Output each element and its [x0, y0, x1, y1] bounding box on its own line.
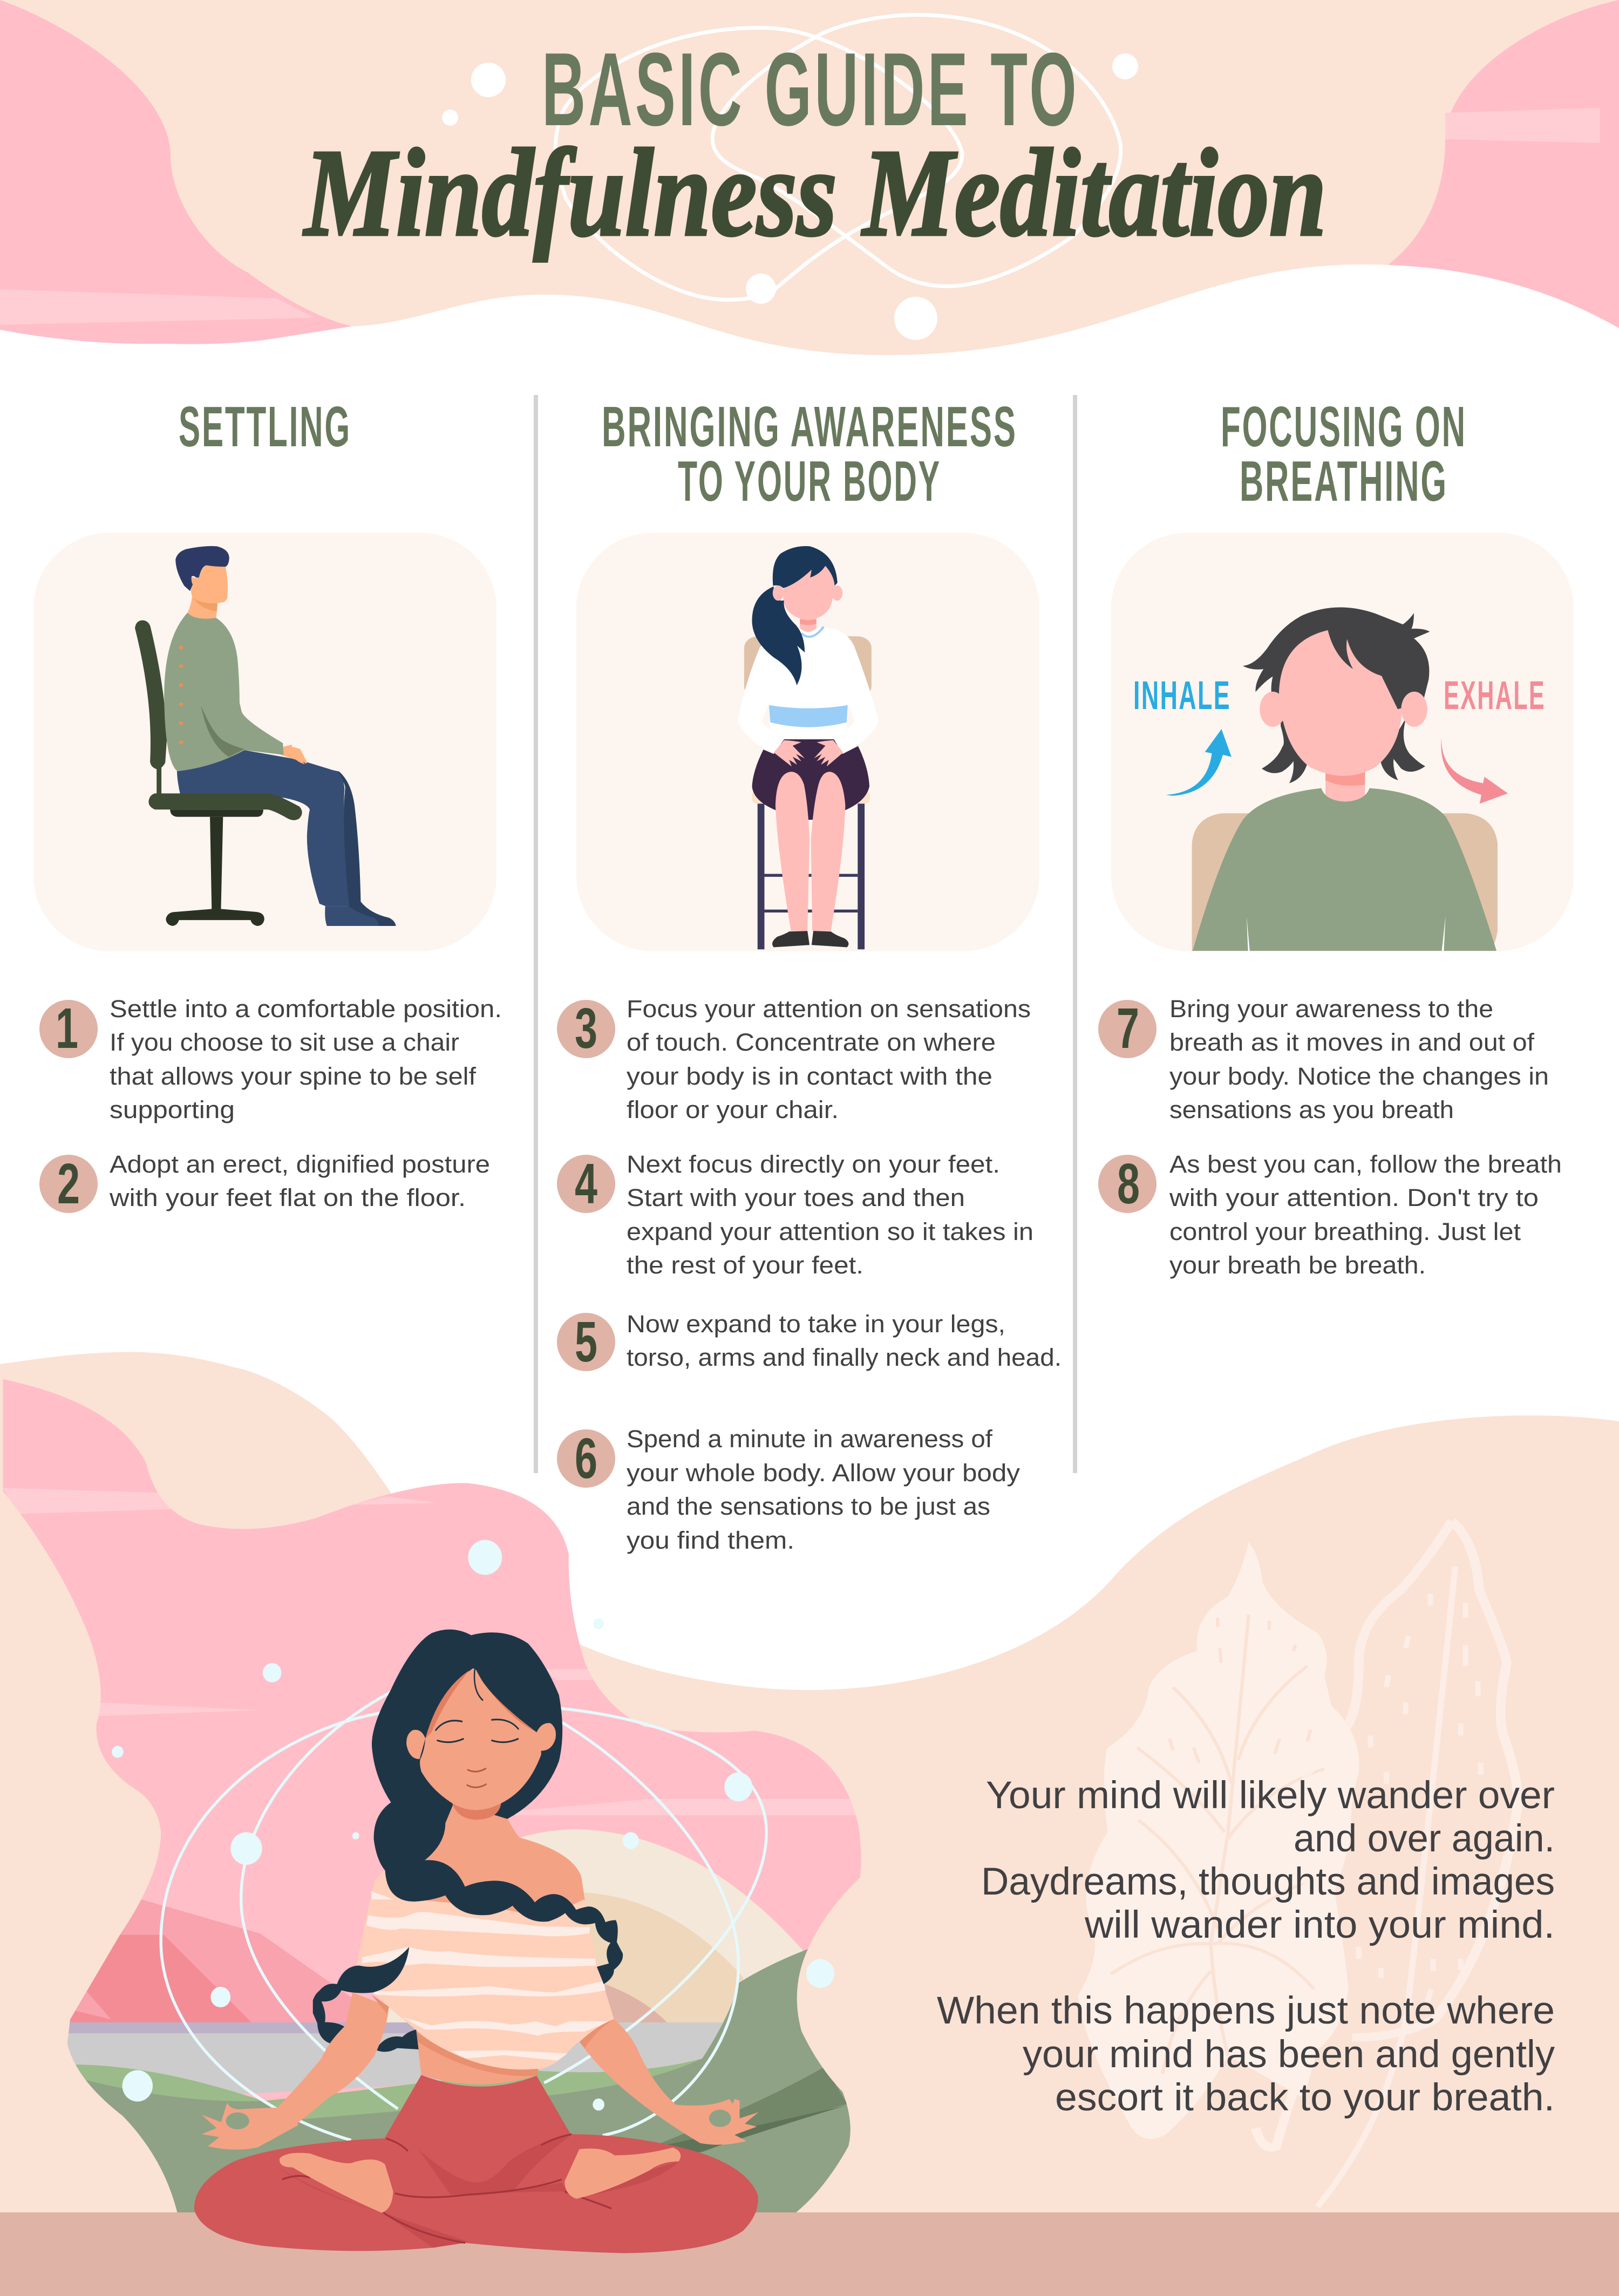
step 7: 7	[1117, 997, 1139, 1060]
icon: seated man on office chair	[135, 546, 396, 926]
step 3	[557, 995, 1031, 1123]
step 2	[39, 1150, 490, 1216]
upper body	[260, 1630, 759, 2145]
step 4: the rest of your feet.	[627, 1251, 863, 1279]
step 1: 1	[56, 997, 78, 1060]
heading: focusing on breathing	[1221, 395, 1467, 513]
feet and left hand	[202, 2103, 681, 2248]
step 5: 5	[575, 1310, 597, 1374]
arrow: inhale	[1166, 729, 1232, 796]
step 8: with your attention. Don't try to	[1169, 1184, 1539, 1211]
title: BASIC GUIDE TO	[542, 31, 1079, 147]
step 6: and the sensations to be just as	[627, 1493, 990, 1520]
step 1: Settle into a comfortable position.	[110, 995, 502, 1023]
step 4: expand your attention so it takes in	[627, 1218, 1033, 1245]
step 2: 2	[57, 1152, 80, 1216]
meditating woman	[194, 1630, 759, 2253]
title	[303, 31, 1327, 262]
panel: breathing illustration	[1111, 533, 1574, 951]
step 3: your body is in contact with the	[627, 1062, 992, 1090]
step 6	[557, 1425, 1021, 1554]
text block: wandering mind: Daydreams, thoughts and images	[981, 1861, 1555, 1903]
step 1	[39, 995, 502, 1123]
floor	[0, 2212, 1619, 2296]
text block: wandering mind: Your mind will likely wander over	[986, 1774, 1555, 1817]
background leaves	[1078, 1521, 1518, 2206]
orbit rings and bubbles around meditator	[112, 1540, 834, 2140]
step 4: 4	[575, 1152, 597, 1216]
step 4	[557, 1150, 1033, 1279]
step 8: control your breathing. Just let	[1169, 1218, 1521, 1245]
heading: bringing awareness to your body	[602, 395, 1017, 513]
label: inhale: INHALE	[1133, 673, 1231, 718]
text block: wandering mind: escort it back to your breath.	[1055, 2076, 1555, 2119]
arrow: exhale	[1441, 738, 1508, 803]
landscape scene	[3, 1379, 861, 2212]
step 3: Focus your attention on sensations	[627, 995, 1031, 1023]
step 3: 3	[575, 997, 597, 1060]
crossed legs	[194, 2134, 758, 2253]
step 7: Bring your awareness to the	[1169, 995, 1493, 1023]
step 4: Next focus directly on your feet.	[627, 1150, 1000, 1178]
panel: settling illustration	[33, 533, 496, 951]
column dividers	[534, 395, 1077, 1473]
step 4: Start with your toes and then	[627, 1184, 965, 1211]
step 5: torso, arms and finally neck and head.	[627, 1344, 1062, 1371]
text block: wandering mind: and over again.	[1294, 1817, 1555, 1860]
bottom peach background	[0, 1352, 1619, 2296]
step 7: your body. Notice the changes in	[1169, 1062, 1549, 1090]
step 6: Spend a minute in awareness of	[627, 1425, 993, 1453]
step 8	[1098, 1150, 1562, 1279]
header background	[0, 0, 1619, 410]
step 2: with your feet flat on the floor.	[109, 1184, 466, 1211]
step 5	[557, 1310, 1062, 1374]
step 8: 8	[1117, 1152, 1140, 1216]
step 6: you find them.	[627, 1527, 794, 1554]
heading: focusing on breathing: BREATHING	[1240, 449, 1448, 513]
icon: seated woman with ponytail	[738, 546, 879, 949]
step 8: As best you can, follow the breath	[1169, 1150, 1562, 1178]
step 1: that allows your spine to be self	[110, 1062, 477, 1090]
text block: wandering mind: your mind has been and gently	[1023, 2033, 1555, 2076]
step 8: your breath be breath.	[1169, 1251, 1426, 1279]
text block: wandering mind: will wander into your mind.	[1084, 1904, 1555, 1946]
heading: settling: SETTLING	[179, 395, 351, 459]
title: Mindfulness Meditation	[303, 124, 1327, 262]
panel: body awareness illustration	[576, 533, 1039, 951]
step 3: of touch. Concentrate on where	[627, 1028, 996, 1056]
text block: wandering mind: When this happens just note where	[937, 1990, 1555, 2032]
step 1: If you choose to sit use a chair	[110, 1028, 459, 1056]
label: exhale: EXHALE	[1444, 673, 1546, 718]
text block: wandering mind	[937, 1774, 1555, 2119]
step 1: supporting	[110, 1096, 235, 1123]
step 6: your whole body. Allow your body	[627, 1459, 1021, 1487]
step 7	[1098, 995, 1549, 1123]
heading: bringing awareness to your body: TO YOUR BODY	[678, 449, 941, 513]
step 3: floor or your chair.	[627, 1096, 839, 1123]
step 6: 6	[575, 1427, 597, 1490]
decorative orbit lines and bubbles in header	[442, 15, 1138, 340]
heading: bringing awareness to your body: BRINGING AWARENESS	[602, 395, 1017, 459]
step 7: sensations as you breath	[1169, 1096, 1454, 1123]
step 2: Adopt an erect, dignified posture	[110, 1150, 490, 1178]
icon: person breathing	[1166, 607, 1508, 951]
step 5: Now expand to take in your legs,	[627, 1310, 1005, 1338]
step 7: breath as it moves in and out of	[1169, 1028, 1535, 1056]
